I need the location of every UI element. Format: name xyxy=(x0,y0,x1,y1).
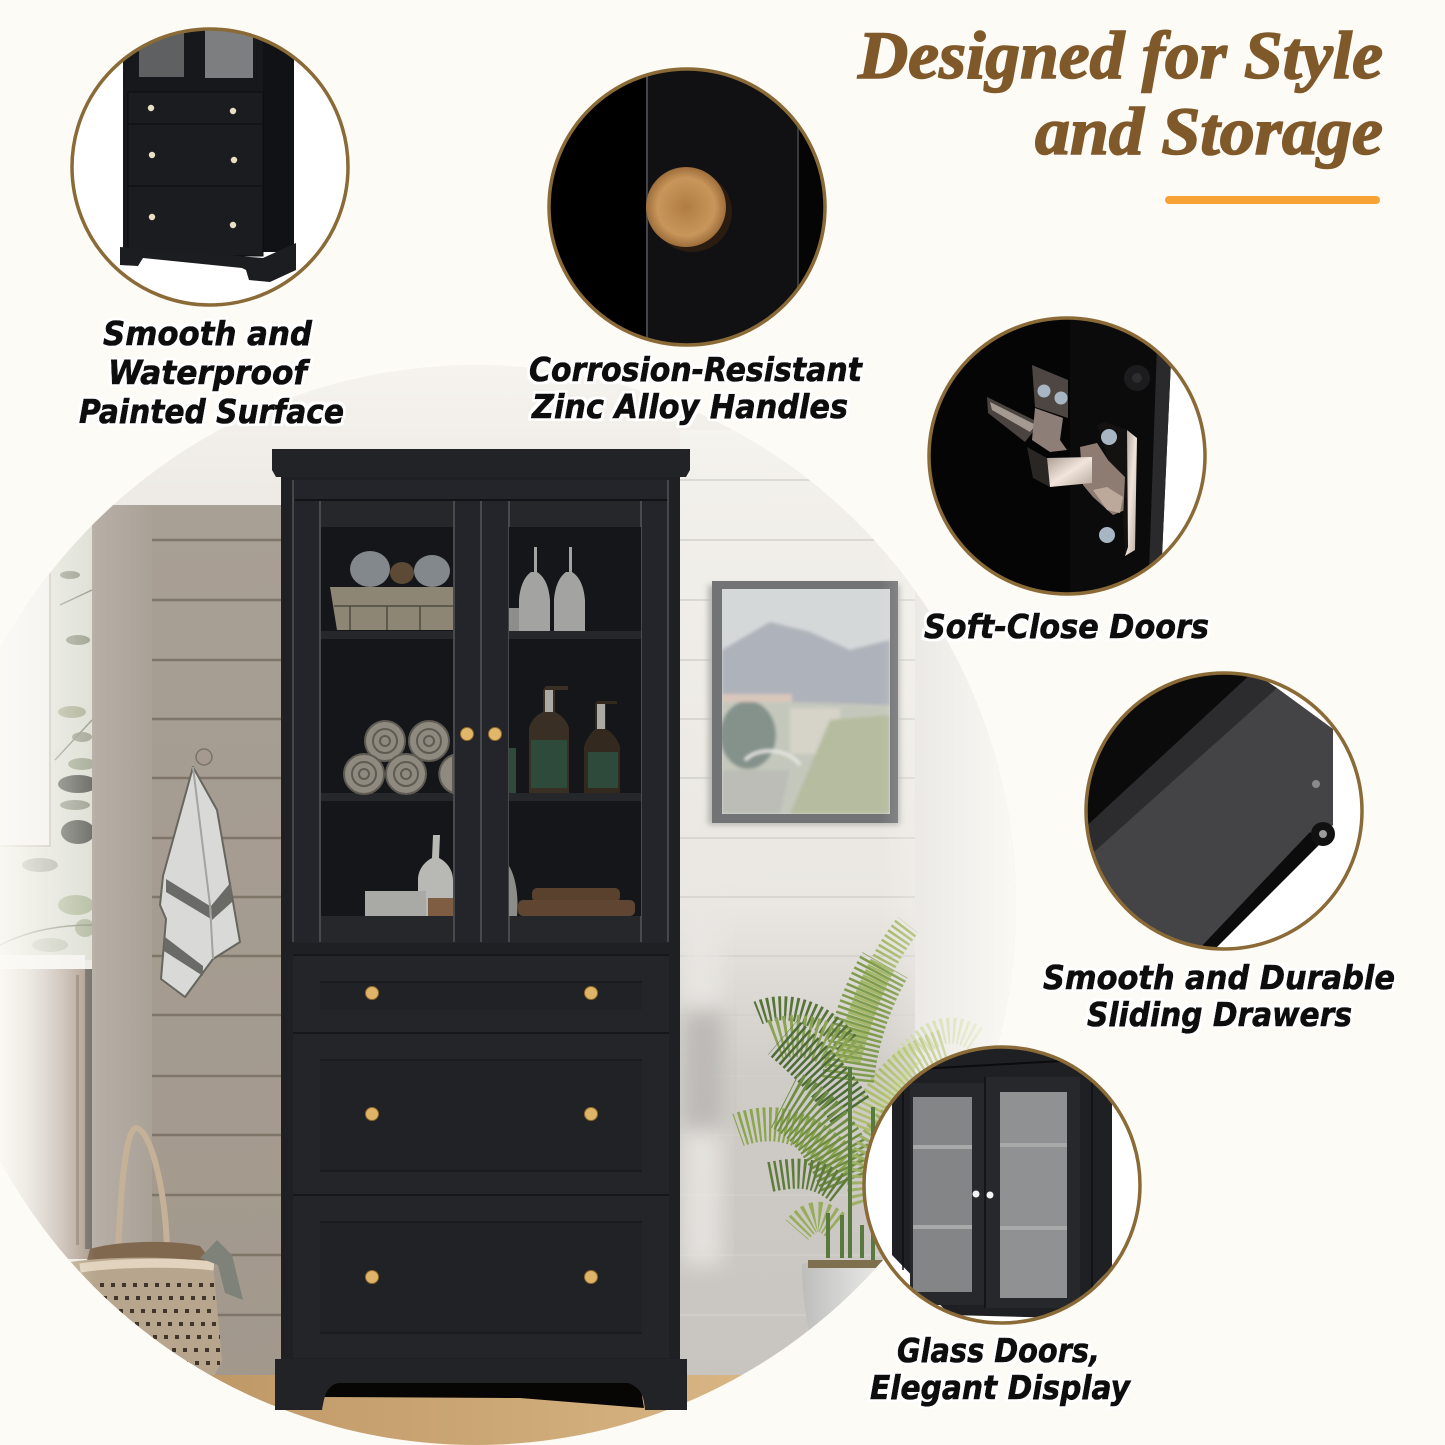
floor xyxy=(205,1375,765,1445)
mirror xyxy=(12,572,51,847)
label: sliding drawers: Smooth and Durable xyxy=(1043,958,1395,997)
edge fades xyxy=(0,365,1016,1278)
framed painting xyxy=(708,581,900,825)
under-cabinet shadow xyxy=(324,1383,644,1408)
label: sliding drawers: Sliding Drawers xyxy=(1087,995,1352,1034)
basket xyxy=(70,1128,243,1384)
vanity xyxy=(13,955,92,1259)
label: painted surface: Smooth and xyxy=(103,314,312,353)
label: zinc handles xyxy=(529,350,863,426)
upper body xyxy=(281,477,680,943)
detail circle: sliding drawer xyxy=(1080,665,1362,960)
door knobs xyxy=(460,728,502,740)
detail circle: glass doors xyxy=(864,1040,1140,1323)
potted plant xyxy=(738,925,977,1352)
label: glass doors: Glass Doors, xyxy=(897,1331,1100,1370)
label: painted surface: Painted Surface xyxy=(79,392,344,431)
column xyxy=(92,505,152,1390)
detail circle: painted surface xyxy=(72,20,348,305)
label: glass doors: Elegant Display xyxy=(870,1368,1131,1407)
label: glass doors xyxy=(870,1331,1131,1407)
top cap xyxy=(272,449,690,477)
detail circle: zinc handle xyxy=(549,68,829,348)
towels on basket xyxy=(330,551,453,630)
left wallpaper wall xyxy=(0,526,92,960)
amber pump bottles xyxy=(509,686,620,793)
label: painted surface: Waterproof xyxy=(108,353,310,392)
lower drawers xyxy=(281,943,680,1363)
label: painted surface xyxy=(79,314,344,431)
label: sliding drawers xyxy=(1043,958,1395,1034)
title: Designed for Style xyxy=(857,17,1383,93)
main cabinet xyxy=(272,449,690,1410)
grey bottles xyxy=(509,547,585,631)
label: zinc handles: Zinc Alloy Handles xyxy=(531,387,848,426)
plinth base xyxy=(275,1359,687,1410)
title xyxy=(857,17,1383,169)
right shiplap wall xyxy=(680,479,915,1380)
label: zinc handles: Corrosion-Resistant xyxy=(529,350,863,389)
room scene circle xyxy=(0,360,1030,1445)
title: and Storage xyxy=(1035,93,1383,169)
drawer knobs xyxy=(366,986,598,1284)
hanging towel xyxy=(160,767,240,997)
shiplap wall left xyxy=(152,505,282,1405)
soap bottle and box xyxy=(365,835,453,916)
right glass door interior xyxy=(509,527,641,916)
label: soft-close doors: Soft-Close Doors xyxy=(924,607,1209,646)
detail circle: soft-close hinge xyxy=(929,317,1210,600)
rolled towels xyxy=(344,721,453,794)
title underline xyxy=(1165,196,1380,204)
hook xyxy=(196,749,212,765)
folded brown towels xyxy=(509,866,635,916)
left glass door interior xyxy=(321,527,453,916)
